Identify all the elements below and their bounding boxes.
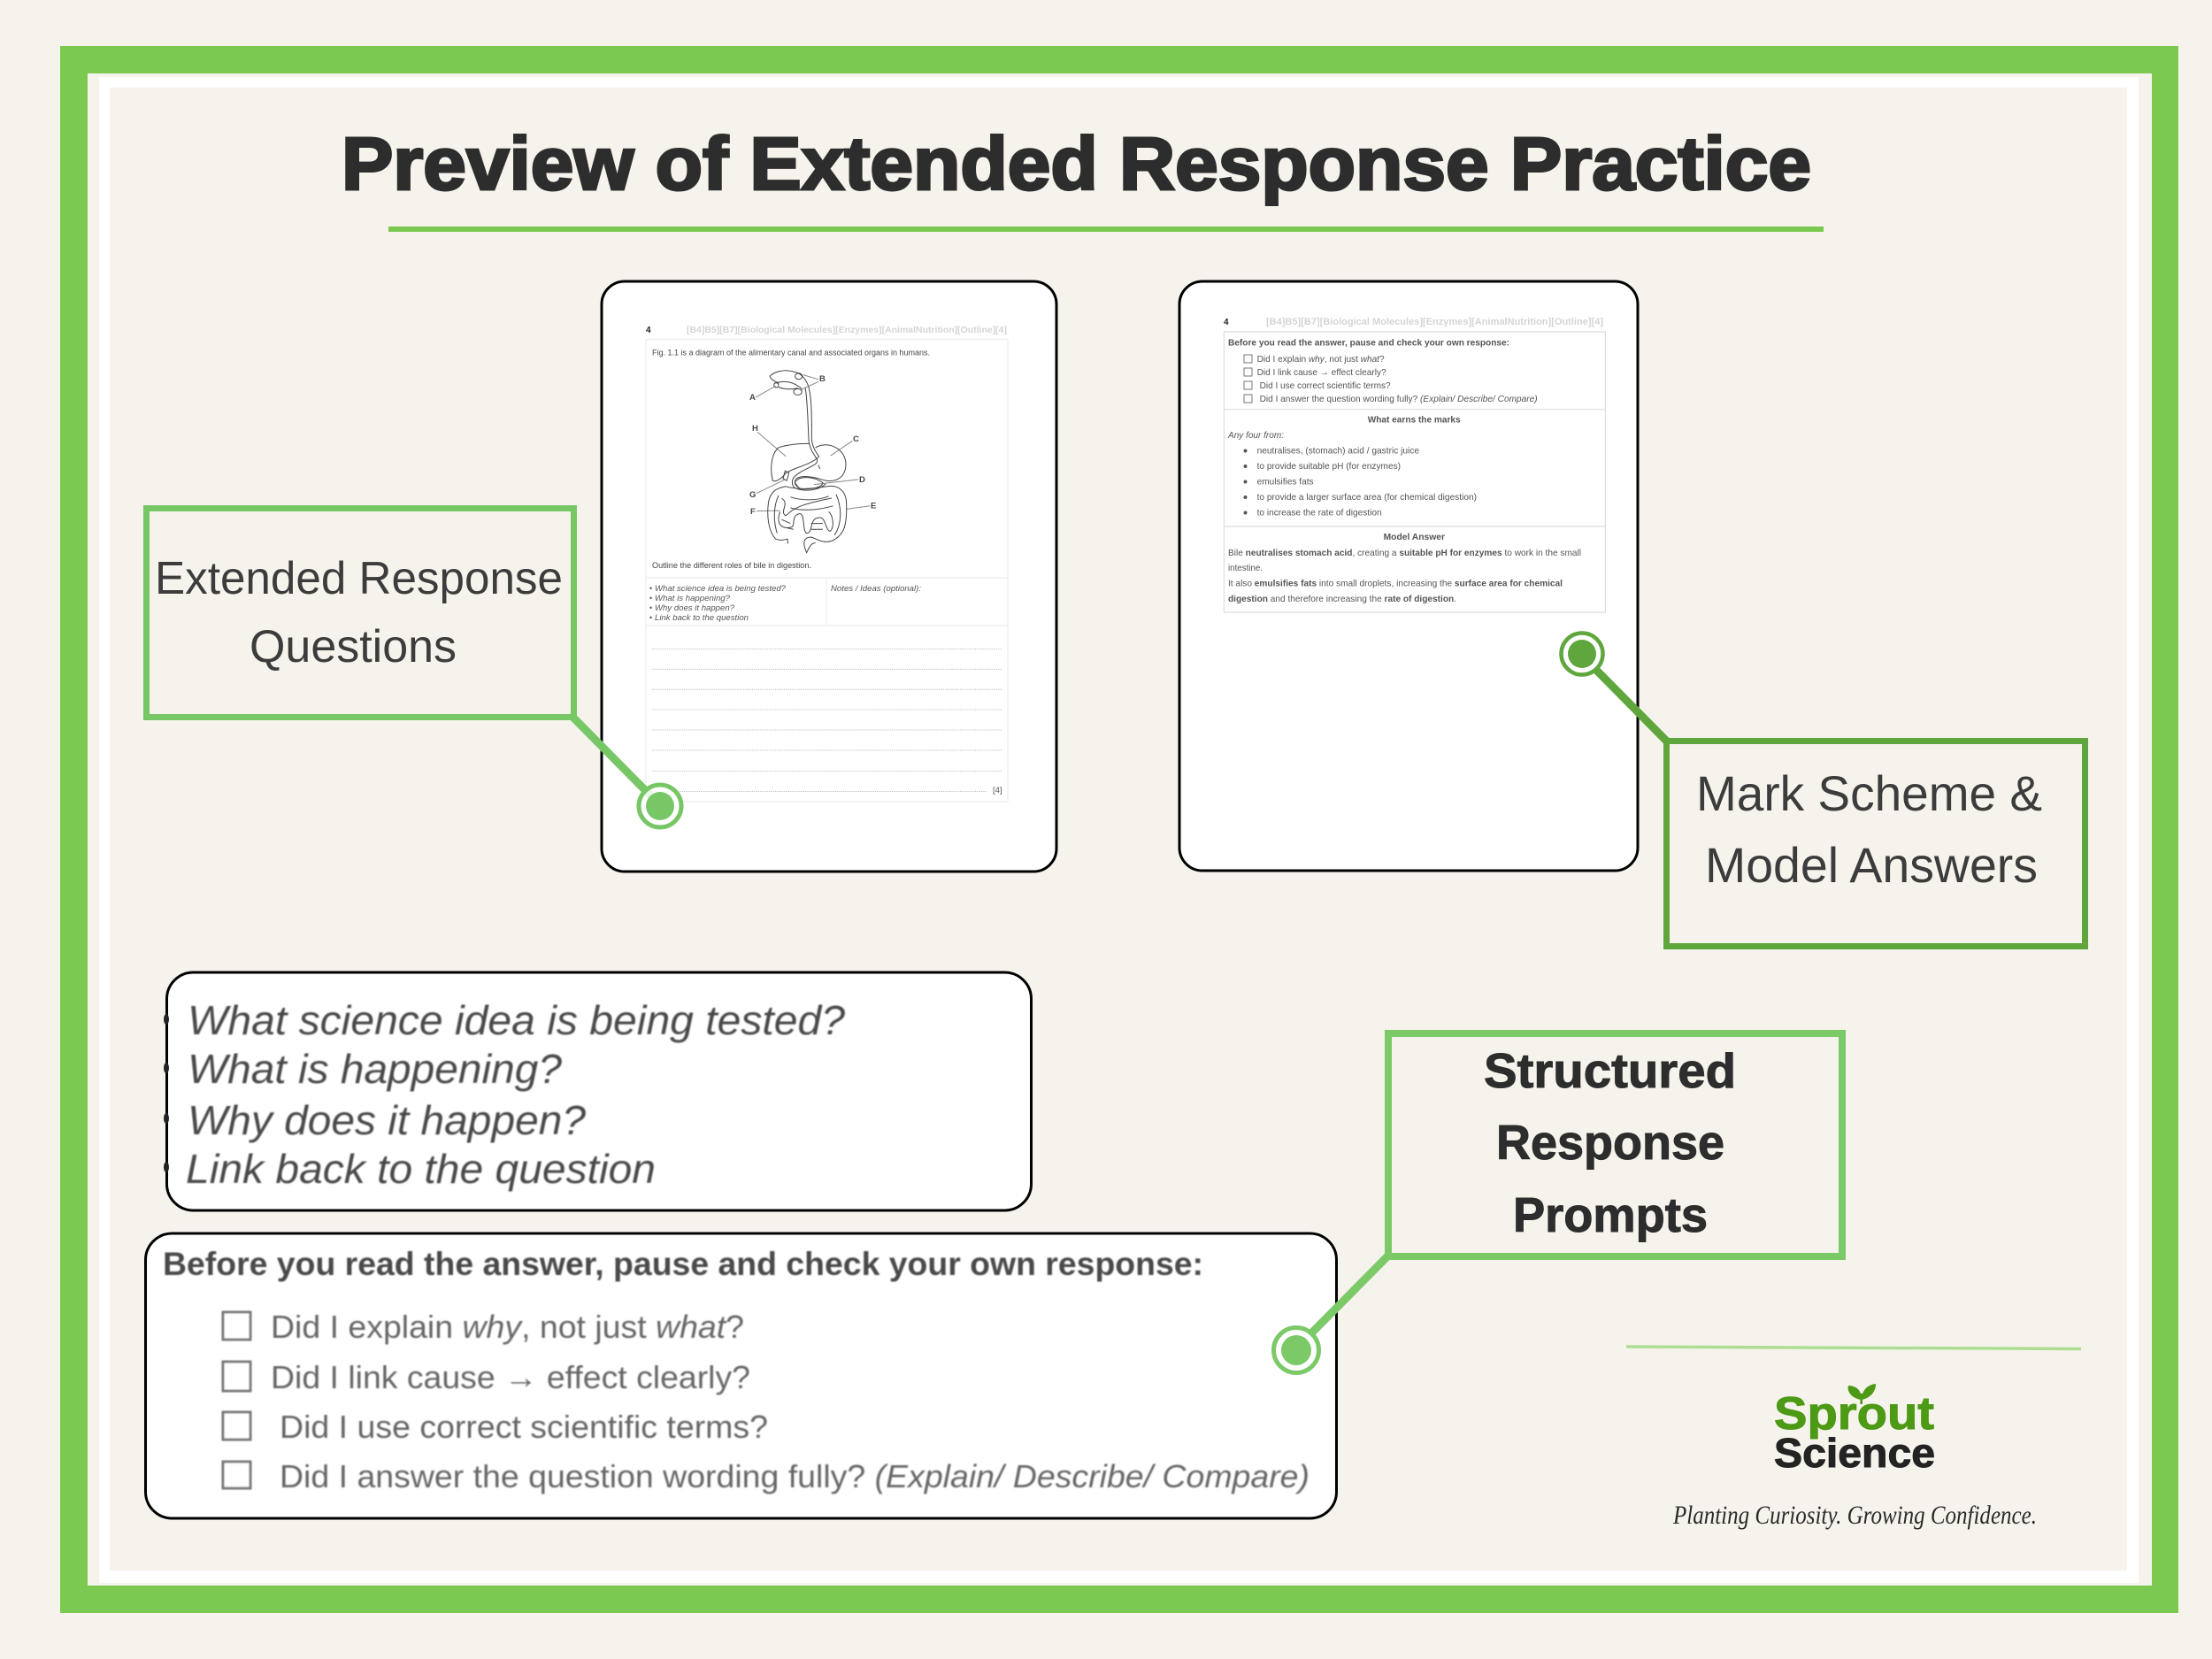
icon: digestive system diagram (756, 371, 870, 553)
panel: mark scheme page: It also emulsifies fats into small droplets, increasing the surface area for chemical (1228, 580, 1563, 589)
panel: mark scheme page: Did I link cause → effect clearly? (1257, 368, 1386, 378)
response prompts in question page: • (649, 594, 652, 603)
panel: mark scheme page: to provide suitable pH (for enzymes) (1257, 462, 1401, 472)
panel: extended response question page (602, 281, 1056, 872)
callout: mark scheme and model answers (1667, 741, 2085, 947)
panel: mark scheme page: Did I use correct scientific terms? (1260, 381, 1391, 391)
response prompts in question page: What is happening? (655, 594, 730, 603)
panel: extended response question page: Fig. 1.1 is a diagram of the alimentary canal and associated organs in humans. (652, 349, 930, 357)
response prompts in question page: What science idea is being tested? (655, 584, 786, 593)
callout: mark scheme and model answers: Mark Scheme & (1696, 765, 2042, 821)
panel: response prompts: What science idea is being tested? (188, 997, 845, 1043)
diagram labels: C (853, 434, 859, 444)
response prompts in question page (649, 584, 922, 622)
response prompts in question page: • (649, 603, 652, 612)
logo divider line (1626, 1347, 2081, 1348)
panel: self-check checklist: Before you read the answer, pause and check your own response: (163, 1246, 1203, 1282)
panel: extended response question page: [4] (993, 786, 1002, 795)
diagram labels: F (750, 507, 756, 517)
diagram labels: A (749, 393, 756, 403)
panel: mark scheme page: to increase the rate of digestion (1257, 508, 1382, 518)
diagram labels: H (752, 424, 758, 434)
panel: response prompts (164, 972, 1032, 1210)
arrow: mark scheme leader and marker (1561, 634, 1667, 741)
panel: mark scheme page: to provide a larger surface area (for chemical digestion) (1257, 493, 1477, 503)
callout: extended response questions: Questions (250, 621, 457, 672)
response prompts in question page: • (649, 584, 652, 593)
panel: extended response question page: Outline the different roles of bile in digestion. (652, 561, 811, 570)
response prompts in question page: Link back to the question (655, 613, 749, 622)
panel: self-check checklist: Did I link cause → effect clearly? (271, 1359, 750, 1395)
diagram labels (749, 374, 876, 517)
panel: response prompts: What is happening? (188, 1046, 562, 1092)
panel: self-check checklist (145, 1233, 1336, 1518)
panel: mark scheme page: Any four from: (1227, 431, 1284, 441)
panel: mark scheme page (1179, 281, 1638, 871)
panel: mark scheme page: emulsifies fats (1257, 478, 1314, 488)
callout: structured response prompts: Response (1496, 1115, 1724, 1170)
panel: mark scheme page: Did I explain why, not just what? (1257, 355, 1385, 365)
title: Preview of Extended Response Practice (342, 122, 1811, 205)
panel: response prompts: Link back to the question (186, 1146, 656, 1192)
diagram labels: D (859, 475, 865, 485)
panel: mark scheme page: neutralises, (stomach) acid / gastric juice (1257, 447, 1419, 457)
arrow: structured prompts leader and marker (1274, 1255, 1389, 1373)
panel: mark scheme page: What earns the marks (1368, 416, 1461, 426)
panel: extended response question page: [B4]B5][B7][Biological Molecules][Enzymes][AnimalNutrition][Outline][4] (687, 325, 1007, 335)
tagline: Planting Curiosity. Growing Confidence. (1672, 1501, 2037, 1530)
panel: mark scheme page: Did I answer the question wording fully? (Explain/ Describe/ Compare) (1260, 395, 1538, 404)
response prompts in question page: Why does it happen? (655, 603, 734, 612)
title underline (388, 227, 1824, 232)
logo: Sprout Science: Science (1774, 1430, 1935, 1476)
panel: mark scheme page: Bile neutralises stomach acid, creating a suitable pH for enzymes to work in the small (1228, 549, 1581, 558)
callout: structured response prompts: Structured (1484, 1043, 1736, 1098)
callout: extended response questions: Extended Response (155, 553, 563, 604)
panel: self-check checklist: Did I explain why, not just what? (271, 1309, 744, 1345)
panel: self-check checklist: Did I use correct scientific terms? (280, 1409, 768, 1445)
panel: extended response question page: 4 (646, 326, 651, 335)
panel: self-check checklist: Did I answer the question wording fully? (Explain/ Describe/ Compare) (280, 1458, 1310, 1494)
panel: mark scheme page: [B4]B5][B7][Biological Molecules][Enzymes][AnimalNutrition][Outline][4] (1266, 317, 1603, 327)
logo: Sprout Science: Sprout (1774, 1388, 1934, 1440)
callout: structured response prompts (1388, 1033, 1842, 1256)
panel: mark scheme page: 4 (1224, 318, 1229, 327)
diagram labels: E (871, 501, 876, 511)
panel: response prompts: Why does it happen? (188, 1097, 586, 1143)
panel: mark scheme page: intestine. (1228, 564, 1263, 573)
diagram labels: B (819, 374, 826, 384)
callout: extended response questions (147, 508, 573, 717)
diagram labels: G (749, 490, 756, 500)
panel: mark scheme page: Before you read the answer, pause and check your own response: (1228, 339, 1509, 349)
panel: mark scheme page: Model Answer (1384, 533, 1445, 542)
arrow: extended response leader and marker (573, 718, 681, 827)
panel: mark scheme page: digestion and therefore increasing the rate of digestion. (1228, 595, 1456, 604)
response prompts in question page: Notes / Ideas (optional): (831, 584, 922, 593)
icon: sprout leaves (1848, 1384, 1876, 1404)
callout: mark scheme and model answers: Model Answers (1705, 837, 2038, 893)
logo: Sprout Science (1774, 1384, 1935, 1476)
callout: structured response prompts: Prompts (1513, 1187, 1708, 1242)
response prompts in question page: • (649, 613, 652, 622)
